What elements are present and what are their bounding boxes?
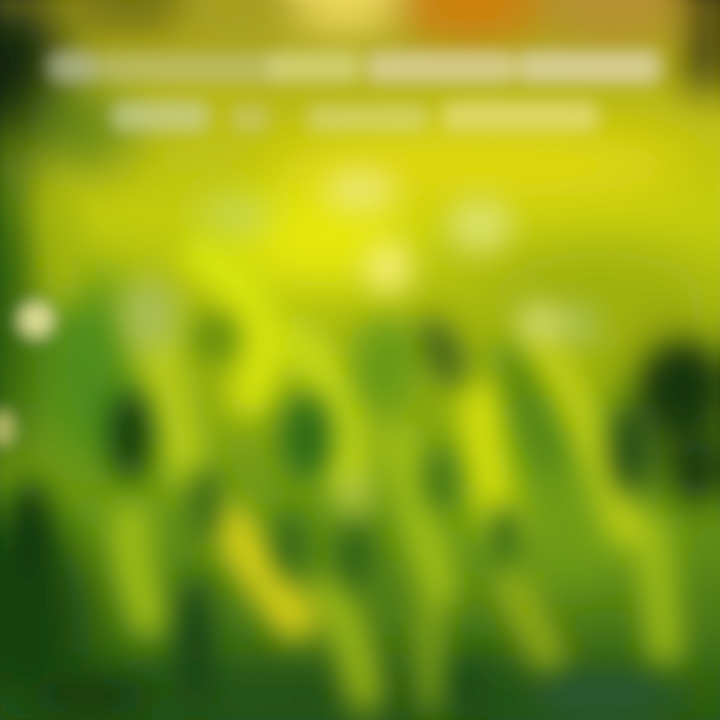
white flowers xyxy=(0,302,54,446)
title: second line (illegible blur) xyxy=(112,102,598,130)
dark shadows between blades xyxy=(8,310,720,717)
title: first line (illegible blur) xyxy=(48,52,660,82)
bright grass blades xyxy=(60,210,665,700)
pale highlights xyxy=(122,170,596,517)
warm sunlight at top xyxy=(70,0,720,90)
